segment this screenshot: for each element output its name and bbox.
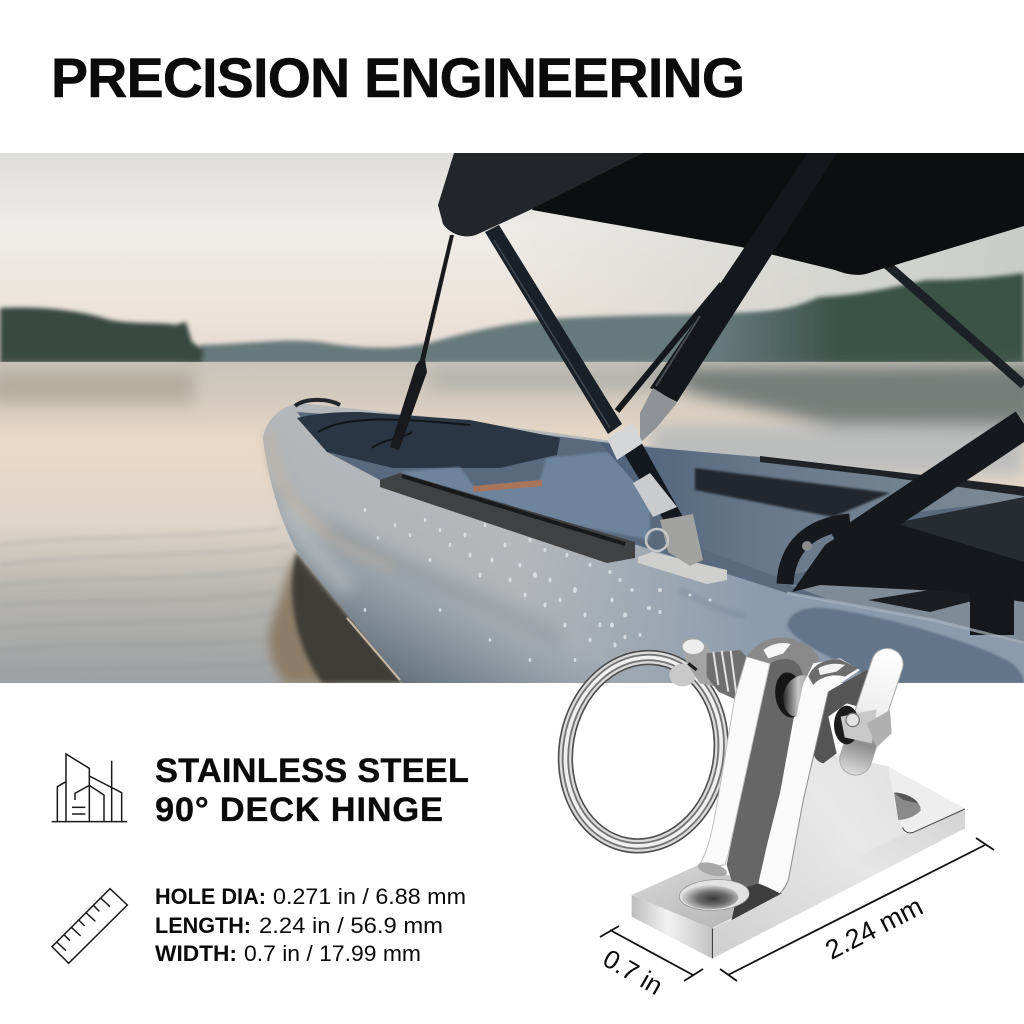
- spec: width: 0.7 in / 17.99 mm: [244, 941, 421, 966]
- bow seat: [297, 412, 560, 468]
- split ring: [551, 645, 736, 858]
- seat strap: [840, 424, 1024, 547]
- pin head: [669, 638, 717, 687]
- front mounting hole: [679, 878, 750, 912]
- front corner line: [711, 928, 714, 958]
- small installed hinge: [638, 514, 727, 584]
- lower chrome sleeve: [633, 473, 677, 517]
- waterline glint: [347, 618, 400, 680]
- rear plate edge: [903, 809, 965, 833]
- water ripples: [2, 526, 288, 572]
- sky: [0, 153, 904, 362]
- water: [0, 362, 1024, 684]
- ear cap highlight: [818, 664, 845, 675]
- title: PRECISION ENGINEERING: [51, 47, 745, 109]
- spec: hole diameter: HOLE DIA:: [155, 884, 266, 909]
- heading: product name: 90° DECK HINGE: [155, 791, 443, 829]
- hull blue tint: [566, 544, 1024, 683]
- pole highlight: [494, 240, 610, 428]
- spec: width: WIDTH:: [155, 941, 237, 966]
- long face: [713, 810, 965, 958]
- pole collar: [640, 388, 677, 443]
- canopy underside: [532, 153, 1024, 275]
- spec: length: 2.24 in / 56.9 mm: [259, 913, 443, 938]
- seat bungee: [318, 419, 470, 448]
- hull crease shadow: [330, 528, 560, 640]
- left tree line: [0, 308, 204, 364]
- dimension label: length: 2.24 mm: [820, 891, 928, 965]
- photo: kayak on a misty lake with bimini top: [0, 153, 1024, 684]
- pole joint: [607, 423, 643, 460]
- deck track rail: [380, 473, 635, 563]
- sky haze at right: [612, 225, 1024, 362]
- rear plate top: [888, 767, 965, 833]
- rear hole shade: [894, 793, 918, 803]
- seat front: [792, 523, 1024, 602]
- bow light rim: [270, 432, 395, 566]
- hull reflection warm: [269, 555, 340, 683]
- cockpit interior: [297, 412, 1024, 645]
- toggle pin end: [846, 713, 859, 727]
- thin rear strut: [617, 284, 722, 411]
- icon: building outline: [52, 754, 127, 822]
- pole 2 highlight: [656, 316, 700, 386]
- toggle wing: [836, 644, 907, 779]
- right forest: [720, 273, 1024, 364]
- front plate top: [632, 865, 782, 928]
- channel inner face: [727, 642, 820, 920]
- dimension line: width: [600, 926, 703, 981]
- hole inner: [682, 885, 738, 909]
- kayak hull: [263, 404, 672, 683]
- spring coil lines: [713, 651, 737, 697]
- seat cushion: [895, 497, 1024, 565]
- channel lower shadow: [732, 883, 782, 920]
- spec: hole diameter: [155, 884, 466, 909]
- dimension line: length: [720, 838, 994, 981]
- pivot pin: [783, 675, 813, 716]
- far rail: [760, 456, 1024, 496]
- lower bow highlight: [285, 505, 350, 590]
- water drops on hull: [364, 508, 712, 670]
- far wall of cockpit: [600, 443, 1024, 578]
- deck sheen: [680, 590, 745, 616]
- dimension label: width: 0.7 in: [598, 943, 668, 1001]
- ear dark disc: [813, 670, 879, 763]
- toggle hex piece: [867, 710, 892, 747]
- product: stainless steel deck hinge: [551, 637, 965, 958]
- pivot hole: [772, 671, 806, 719]
- flange weld: [696, 860, 728, 879]
- ear cap shading: [808, 659, 858, 685]
- bow handle: [295, 400, 340, 406]
- far wall dark window: [695, 468, 890, 517]
- orange accent: [473, 480, 542, 492]
- spring: [707, 650, 748, 700]
- toggle pin: [841, 709, 877, 743]
- spec: length: LENGTH:: [155, 913, 251, 938]
- right strut: [885, 263, 1024, 385]
- heading: product name: [155, 752, 469, 829]
- spec: hole diameter: 0.271 in / 6.88 mm: [273, 884, 466, 909]
- right flange: [760, 658, 860, 893]
- icon: ruler: [52, 889, 127, 963]
- seat leg: [970, 596, 1014, 635]
- side wall: [717, 692, 905, 930]
- cap highlight: [763, 643, 791, 658]
- specifications: [155, 884, 466, 966]
- recess glint line: [787, 593, 1024, 643]
- hull reflection dark: [292, 552, 403, 683]
- track groove: [402, 476, 625, 544]
- cockpit well: [400, 452, 650, 540]
- water reflections: [0, 365, 1024, 475]
- spec: width: [155, 941, 421, 966]
- end face: [632, 895, 712, 958]
- bimini pole 1 lower: [623, 440, 683, 524]
- heading: product name: STAINLESS STEEL: [155, 752, 469, 790]
- left flange: [698, 657, 770, 867]
- bimini pole 1 upper: [485, 225, 622, 434]
- right flange edges: [780, 692, 828, 893]
- far hills: [200, 310, 790, 364]
- toggle pin dark collar: [834, 706, 859, 744]
- flange cap: [747, 637, 821, 678]
- canopy front flap: [438, 153, 643, 236]
- under-seat gap: [790, 585, 1024, 645]
- side recess: [787, 608, 1024, 683]
- rear mounting hole: [894, 793, 921, 820]
- bimini strap left: [390, 235, 454, 450]
- bimini pole 2: [650, 153, 837, 402]
- wheel bolt: [802, 541, 812, 551]
- under-seat bracket: [868, 590, 970, 612]
- spec: length: [155, 913, 443, 938]
- seat wheel arc: [785, 522, 850, 584]
